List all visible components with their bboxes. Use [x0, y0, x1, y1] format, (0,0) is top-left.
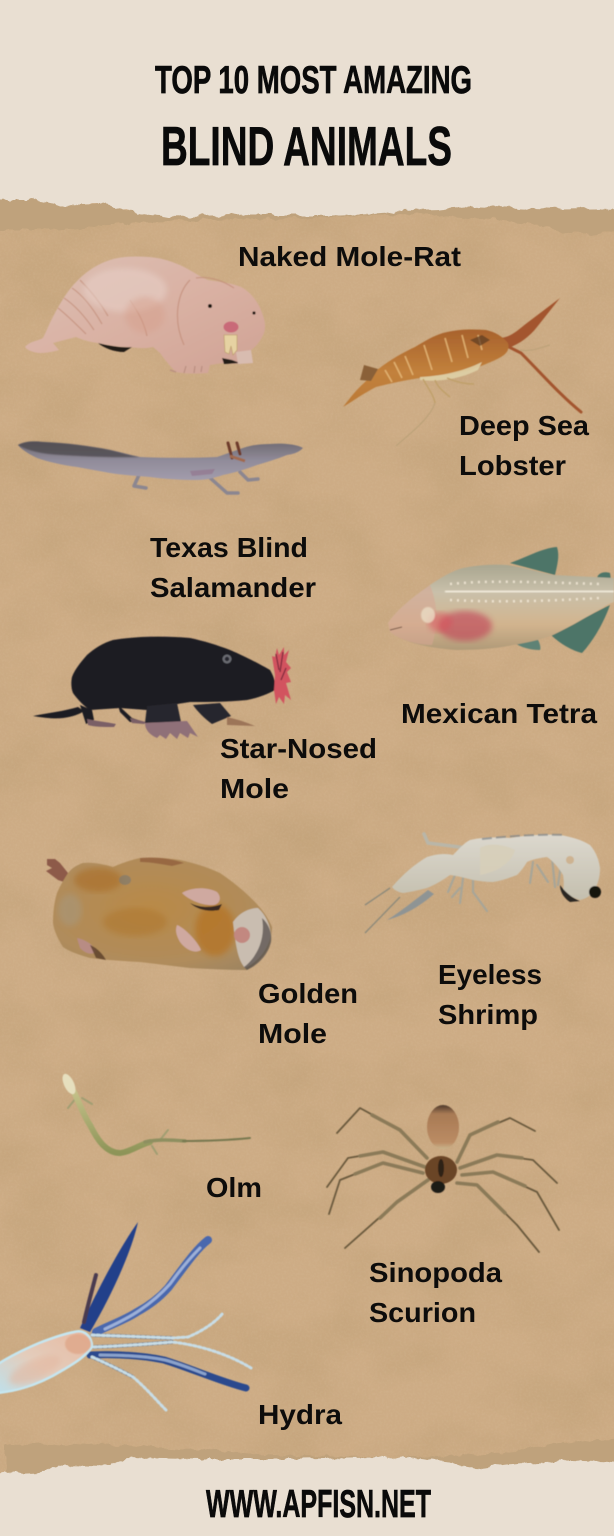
label: Star-Nosed Mole: Star-Nosed — [220, 733, 377, 764]
label: Deep Sea Lobster: Deep Sea — [459, 410, 589, 441]
footer: website: WWW.APFISN.NET — [206, 1483, 431, 1526]
label: Sinopoda Scurion: Scurion — [369, 1297, 476, 1328]
title: BLIND ANIMALS — [161, 115, 452, 177]
title: TOP 10 MOST AMAZING — [155, 59, 472, 102]
animal: hydra — [0, 1222, 251, 1410]
animal: olm — [60, 1072, 250, 1154]
panel: header strip with torn edge — [0, 0, 614, 234]
animal: star-nosed mole — [33, 637, 291, 739]
label: Deep Sea Lobster — [459, 410, 589, 481]
animal: eyeless shrimp — [365, 834, 601, 933]
animal: mexican tetra — [388, 547, 614, 653]
animal: naked mole-rat — [25, 256, 265, 374]
label: Eyeless Shrimp: Eyeless — [438, 959, 542, 990]
animal: sinopoda scurion spider — [327, 1105, 559, 1252]
label: Star-Nosed Mole: Mole — [220, 773, 289, 804]
label: Golden Mole: Golden — [258, 978, 358, 1009]
label: Sinopoda Scurion: Sinopoda — [369, 1257, 502, 1288]
label: Texas Blind Salamander: Salamander — [150, 572, 316, 603]
label: Eyeless Shrimp: Shrimp — [438, 999, 538, 1030]
label: Naked Mole-Rat: Naked Mole-Rat — [238, 241, 461, 272]
animal: deep sea lobster — [343, 298, 581, 446]
label: Sinopoda Scurion — [369, 1257, 502, 1328]
label: Deep Sea Lobster: Lobster — [459, 450, 566, 481]
panel: footer strip with torn edge — [0, 1438, 614, 1536]
label: Golden Mole — [258, 978, 358, 1049]
label: Texas Blind Salamander — [150, 532, 316, 603]
animal: golden mole — [46, 858, 272, 970]
label: Golden Mole: Mole — [258, 1018, 327, 1049]
label: Hydra: Hydra — [258, 1399, 342, 1430]
label: Olm: Olm — [206, 1172, 262, 1203]
label: Star-Nosed Mole — [220, 733, 377, 804]
animal: texas blind salamander — [18, 441, 303, 493]
label: Texas Blind Salamander: Texas Blind — [150, 532, 308, 563]
label: Eyeless Shrimp — [438, 959, 542, 1030]
label: Mexican Tetra: Mexican Tetra — [401, 698, 597, 729]
title — [155, 59, 472, 177]
